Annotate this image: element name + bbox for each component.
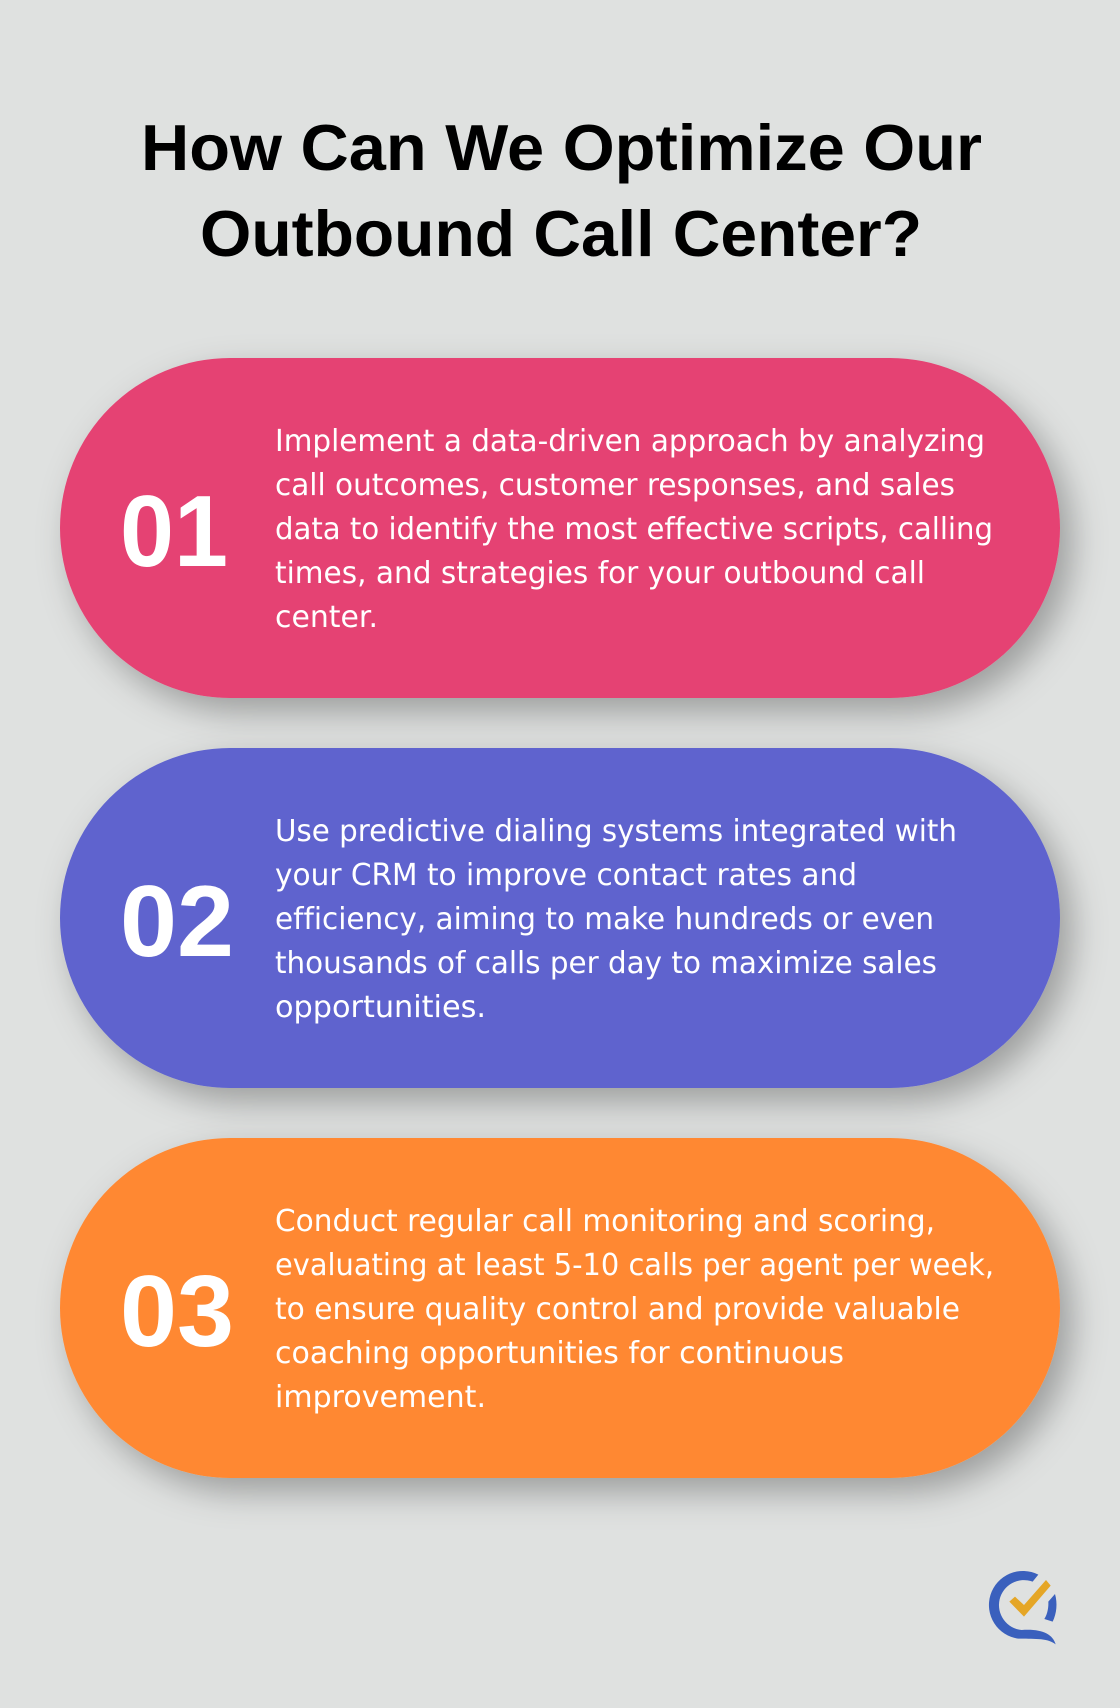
panel: step 01	[60, 358, 1060, 698]
text block: step 03	[275, 1204, 994, 1415]
text block: step 03: Conduct regular call monitoring and scoring,	[275, 1204, 935, 1239]
text block: step 02: your CRM to improve contact rates and	[275, 858, 857, 893]
pill background pink	[60, 358, 1060, 698]
number 03: 03	[120, 1256, 234, 1368]
number 01: 01	[120, 476, 228, 588]
title	[141, 111, 982, 270]
text block: step 02: efficiency, aiming to make hundreds or even	[275, 902, 934, 937]
text block: step 02: opportunities.	[275, 990, 486, 1025]
title: Outbound Call Center?	[200, 197, 922, 270]
text block: step 01: Implement a data-driven approach by analyzing	[275, 424, 985, 459]
text block: step 02: thousands of calls per day to maximize sales	[275, 946, 937, 981]
text block: step 02: Use predictive dialing systems integrated with	[275, 814, 957, 849]
panel: step 03	[60, 1138, 1060, 1478]
text block: step 01	[275, 424, 993, 635]
text block: step 01: times, and strategies for your outbound call	[275, 556, 925, 591]
text block: step 03: improvement.	[275, 1380, 486, 1415]
text block: step 02	[275, 814, 957, 1025]
pill background blue	[60, 748, 1060, 1088]
text block: step 01: data to identify the most effective scripts, calling	[275, 512, 993, 547]
pill background orange	[60, 1138, 1060, 1478]
text block: step 03: coaching opportunities for continuous	[275, 1336, 844, 1371]
number 02: 02	[120, 866, 234, 978]
text block: step 01: call outcomes, customer responses, and sales	[275, 468, 955, 503]
text block: step 01: center.	[275, 600, 378, 635]
title: How Can We Optimize Our	[141, 111, 982, 184]
text block: step 03: to ensure quality control and provide valuable	[275, 1292, 960, 1327]
text block: step 03: evaluating at least 5-10 calls per agent per week,	[275, 1248, 994, 1283]
icon: logo speech bubble with check mark	[989, 1571, 1056, 1644]
panel: step 02	[60, 748, 1060, 1088]
